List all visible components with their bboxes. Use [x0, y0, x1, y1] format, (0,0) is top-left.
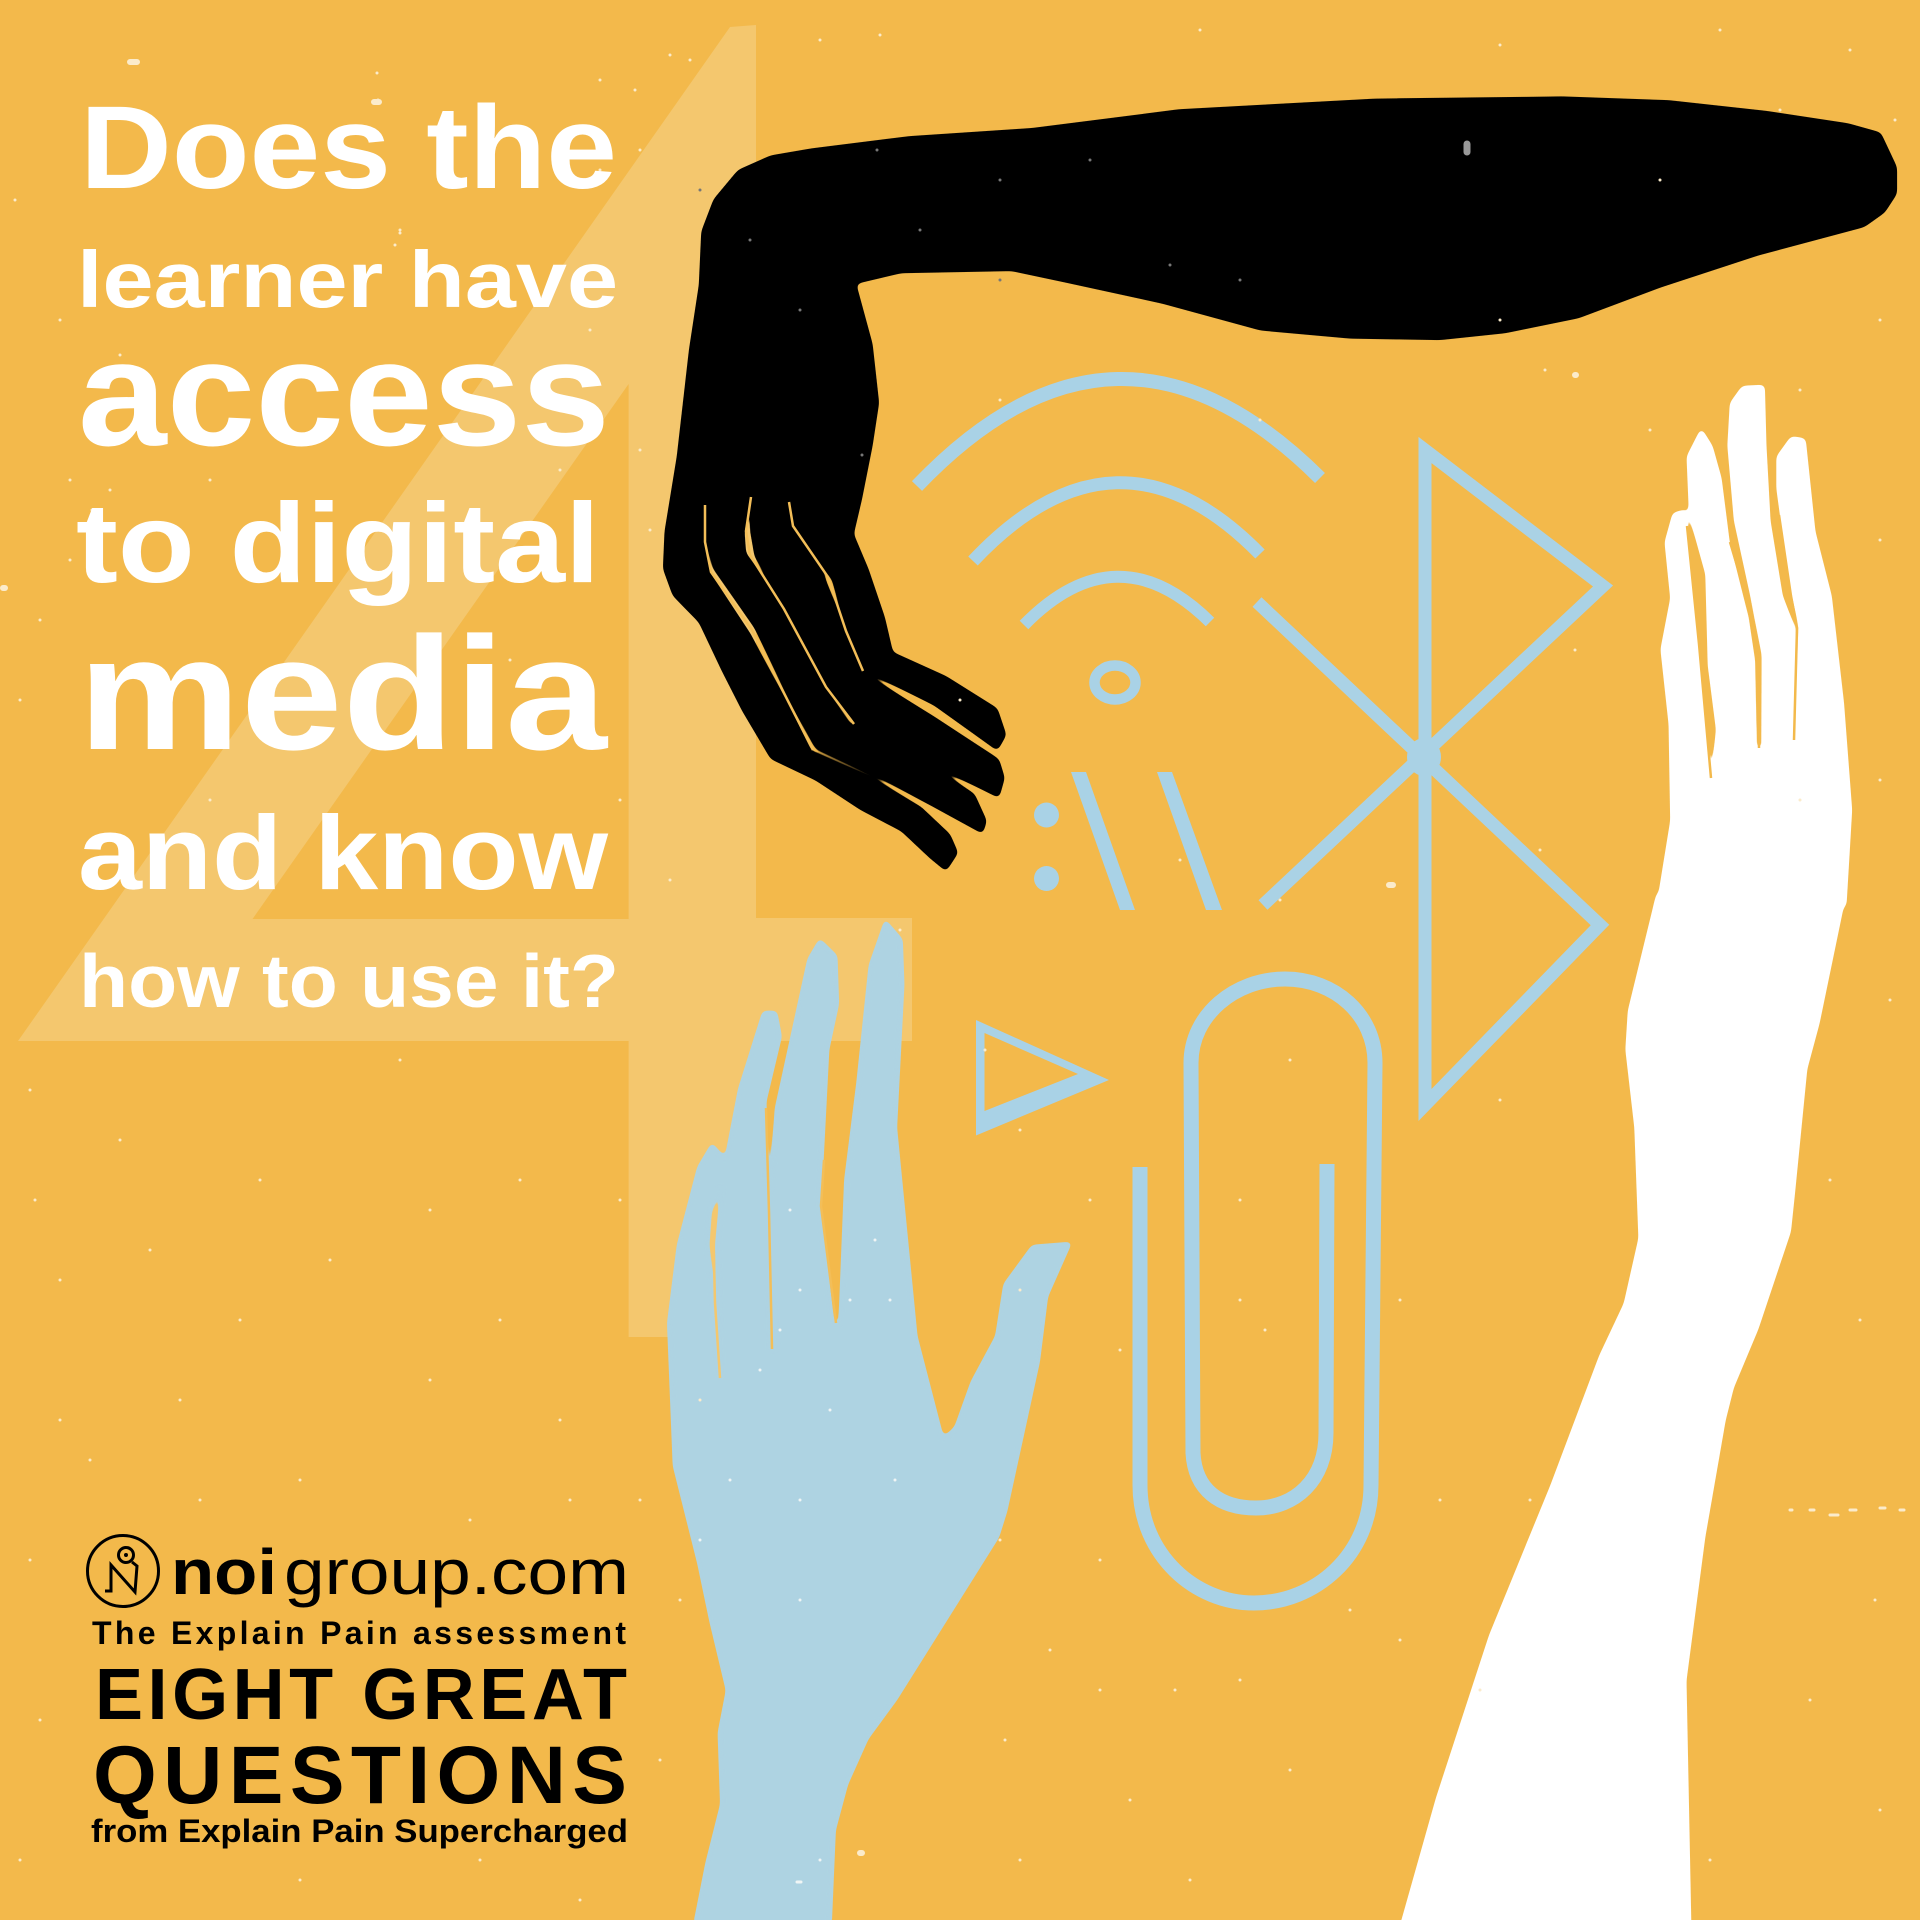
- noigroup logo: noi: [171, 1536, 277, 1608]
- headline question: learner have: [77, 235, 618, 324]
- footer text block: [91, 1615, 628, 1849]
- headline question: and know: [78, 795, 608, 912]
- footer text block: from Explain Pain Supercharged: [91, 1813, 628, 1849]
- icon: loading dots and slashes: [1034, 772, 1222, 910]
- headline question: to digital: [76, 480, 600, 606]
- headline question: media: [78, 604, 609, 784]
- footer text block: EIGHT GREAT: [95, 1655, 627, 1735]
- black arm and hand: [663, 96, 1897, 872]
- headline question: how to use it?: [79, 939, 619, 1023]
- icon: bluetooth symbol: [1257, 450, 1603, 1105]
- blue hand and arm: [667, 918, 1073, 1920]
- headline question: Does the: [80, 82, 617, 214]
- headline question: [76, 82, 619, 1023]
- icon: paperclip: [1140, 979, 1375, 1603]
- footer text block: The Explain Pain assessment: [92, 1615, 626, 1651]
- footer text block: QUESTIONS: [93, 1730, 627, 1821]
- large background numeral 4: [18, 25, 912, 1337]
- headline question: access: [78, 309, 610, 477]
- white hand and arm: [1399, 385, 1852, 1920]
- noigroup logo: group.com: [284, 1536, 629, 1608]
- icon: play triangle: [976, 1020, 1109, 1136]
- icon: noigroup circular emblem: [88, 1536, 158, 1606]
- icon: wifi signal: [917, 379, 1320, 700]
- noigroup logo: [88, 1536, 629, 1608]
